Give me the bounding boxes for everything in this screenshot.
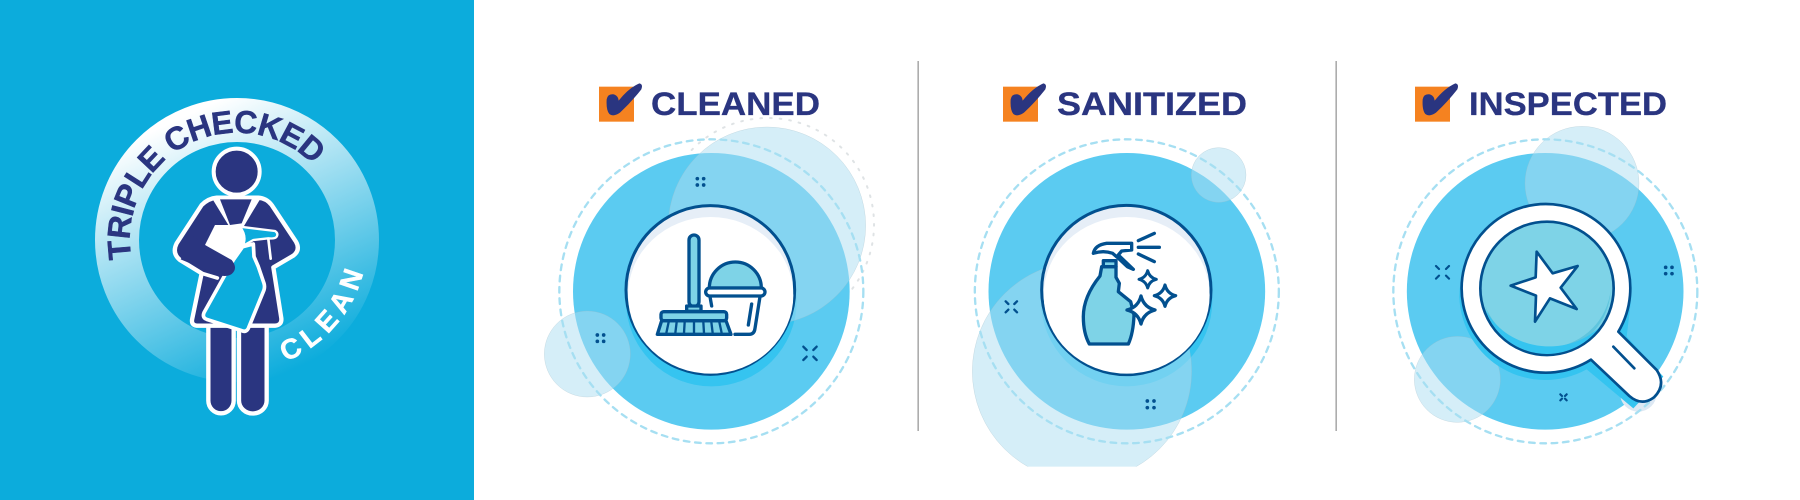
translucent circle large (972, 262, 1192, 481)
icon disc (626, 206, 795, 374)
figure torso and dress (175, 198, 298, 326)
marks (595, 177, 705, 343)
bucket rim (706, 288, 765, 296)
heading check icon (599, 83, 642, 122)
translucent circle small (544, 311, 630, 397)
icon: broom and bucket (657, 235, 765, 334)
heading check icon (1415, 83, 1458, 122)
sparkle mark (1006, 301, 1017, 312)
disc highlight (628, 217, 793, 374)
ring text: clean: CLEAN (280, 268, 364, 359)
heading: inspected: INSPECTED (1469, 86, 1667, 122)
magnifier ring and handle (1462, 204, 1661, 402)
translucent circle small (1191, 148, 1246, 202)
bristle stripes (666, 322, 722, 333)
bucket body (710, 297, 760, 334)
heading check icon (1003, 83, 1046, 122)
circle shadow (1041, 215, 1212, 386)
divider 2 (1336, 61, 1337, 431)
star (1511, 252, 1578, 322)
apron neck (220, 199, 252, 225)
panel: sanitized (972, 83, 1279, 481)
translucent circle bottom (1414, 336, 1500, 422)
circle behind handle (1620, 375, 1657, 412)
sparkle mark (803, 347, 817, 360)
logo ring (117, 120, 357, 360)
trigger head (1093, 243, 1133, 269)
icon disc (1042, 205, 1211, 375)
broom head (661, 312, 727, 321)
lens (1480, 222, 1614, 355)
figure legs (208, 320, 267, 413)
marks (1664, 265, 1674, 275)
dashed ring (559, 139, 863, 443)
bucket dome (709, 262, 761, 288)
disc highlight (1044, 217, 1210, 374)
magnifier shadow (1459, 211, 1663, 408)
circle shadow (626, 216, 797, 386)
main blue circle (1407, 153, 1683, 430)
figure head (214, 149, 260, 195)
bottle neck (1103, 261, 1116, 267)
spray lines (1138, 233, 1159, 262)
translucent circle top (1525, 126, 1639, 240)
dashed ring (975, 139, 1279, 443)
lens shade (1485, 290, 1611, 352)
spray head (240, 227, 277, 246)
broom collar (687, 306, 701, 311)
magnifier (1462, 204, 1661, 402)
bottle body (1083, 267, 1134, 344)
handle highlight (1613, 347, 1634, 368)
dotted ring (692, 118, 874, 292)
apron bib (205, 199, 260, 265)
sparkle medium (1154, 285, 1176, 306)
panel: inspected (1393, 83, 1697, 443)
sparkle large (1127, 296, 1155, 324)
forearm (181, 237, 235, 276)
sparkle marks (1436, 266, 1567, 400)
panel: cleaned (544, 83, 874, 443)
icon: spray bottle (1083, 233, 1176, 344)
main blue circle (988, 153, 1265, 430)
sparkle small (1139, 271, 1156, 288)
forearm lower edge (202, 273, 217, 278)
dashed ring (1393, 139, 1697, 443)
main blue circle (573, 153, 850, 430)
figure: cleaner holding spray bottle (175, 149, 298, 413)
divider 1 (918, 61, 919, 431)
heading: cleaned: CLEANED (651, 86, 820, 122)
spray bottle (203, 244, 264, 331)
panel: blue logo panel (0, 0, 474, 500)
heading: sanitized: SANITIZED (1057, 86, 1247, 122)
marks (1145, 399, 1156, 409)
broom bristles (657, 321, 731, 334)
ring text: triple checked: TRIPLE CHECKED (107, 110, 323, 260)
lens lower highlight (1485, 308, 1600, 354)
broom handle (689, 235, 699, 307)
translucent circle large (668, 127, 866, 324)
spray trigger (268, 239, 271, 259)
